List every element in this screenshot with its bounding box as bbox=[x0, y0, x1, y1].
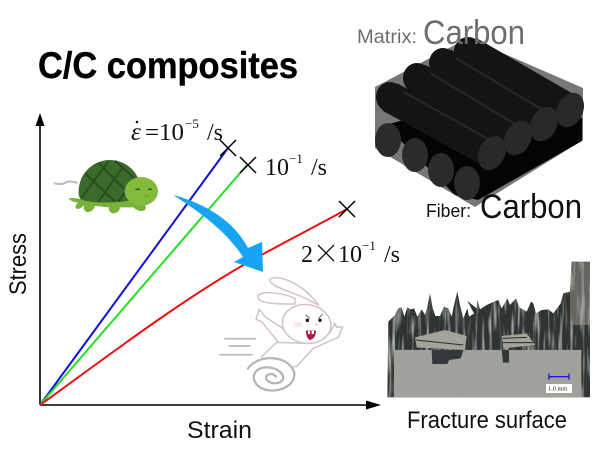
rate label 1e-1: −1 bbox=[289, 151, 303, 166]
lighter debris band bbox=[415, 330, 535, 350]
matrix label: Matrix: bbox=[357, 27, 417, 48]
bottom fiber layer bbox=[385, 100, 582, 200]
rate label 1e-5: ε bbox=[131, 119, 141, 146]
rate label 1e-5 bbox=[131, 116, 223, 146]
fiber back ends bbox=[376, 37, 482, 112]
fiber label: Fiber: bbox=[426, 201, 471, 221]
fracture surface caption: Fracture surface bbox=[407, 407, 567, 434]
polished cross section bbox=[394, 350, 581, 397]
rate label 1e-1: 10 bbox=[265, 155, 289, 181]
y axis arrow bbox=[36, 113, 44, 405]
matrix label: Carbon bbox=[423, 14, 525, 52]
blue curve bbox=[40, 148, 228, 405]
matrix label bbox=[357, 14, 525, 52]
rate label 1e-5: =10 bbox=[145, 120, 184, 146]
fiber ends, top layer bbox=[473, 88, 589, 175]
y axis label: Stress bbox=[5, 233, 32, 295]
fracture surface photo bbox=[387, 260, 592, 398]
rate label 1e-5: /s bbox=[207, 120, 223, 146]
fiber ends, bottom layer bbox=[375, 123, 480, 200]
x axis arrow bbox=[40, 400, 381, 410]
icon: rabbit bbox=[220, 278, 343, 391]
broken fibers bbox=[387, 260, 592, 398]
stress-strain chart bbox=[5, 113, 400, 444]
rate label 1e-5: −5 bbox=[185, 116, 199, 131]
rate label 1e-1: /s bbox=[311, 155, 327, 181]
failure marks bbox=[220, 140, 355, 217]
icon: turtle bbox=[55, 160, 158, 213]
top fiber layer bbox=[390, 51, 570, 153]
green curve bbox=[40, 165, 247, 405]
rate label 2e-1 bbox=[301, 238, 400, 268]
rate label 2e-1: 10 bbox=[338, 242, 362, 268]
red curve bbox=[40, 209, 347, 405]
fiber highlights bbox=[404, 58, 556, 148]
title: C/C composites bbox=[38, 45, 298, 86]
scale bar: 1.0 mm bbox=[548, 386, 567, 393]
matrix block bbox=[375, 38, 583, 207]
fiber label bbox=[426, 188, 582, 226]
arrow: speed increase bbox=[173, 195, 263, 272]
rate label 2e-1: 2 bbox=[301, 242, 313, 268]
composite structure diagram bbox=[357, 14, 589, 226]
rate label 1e-1 bbox=[265, 151, 327, 181]
fiber label: Carbon bbox=[480, 188, 582, 226]
rate label 2e-1: /s bbox=[384, 242, 400, 268]
rate label 2e-1: −1 bbox=[362, 238, 376, 253]
scale bar bbox=[546, 374, 572, 393]
x axis label: Strain bbox=[187, 417, 252, 444]
